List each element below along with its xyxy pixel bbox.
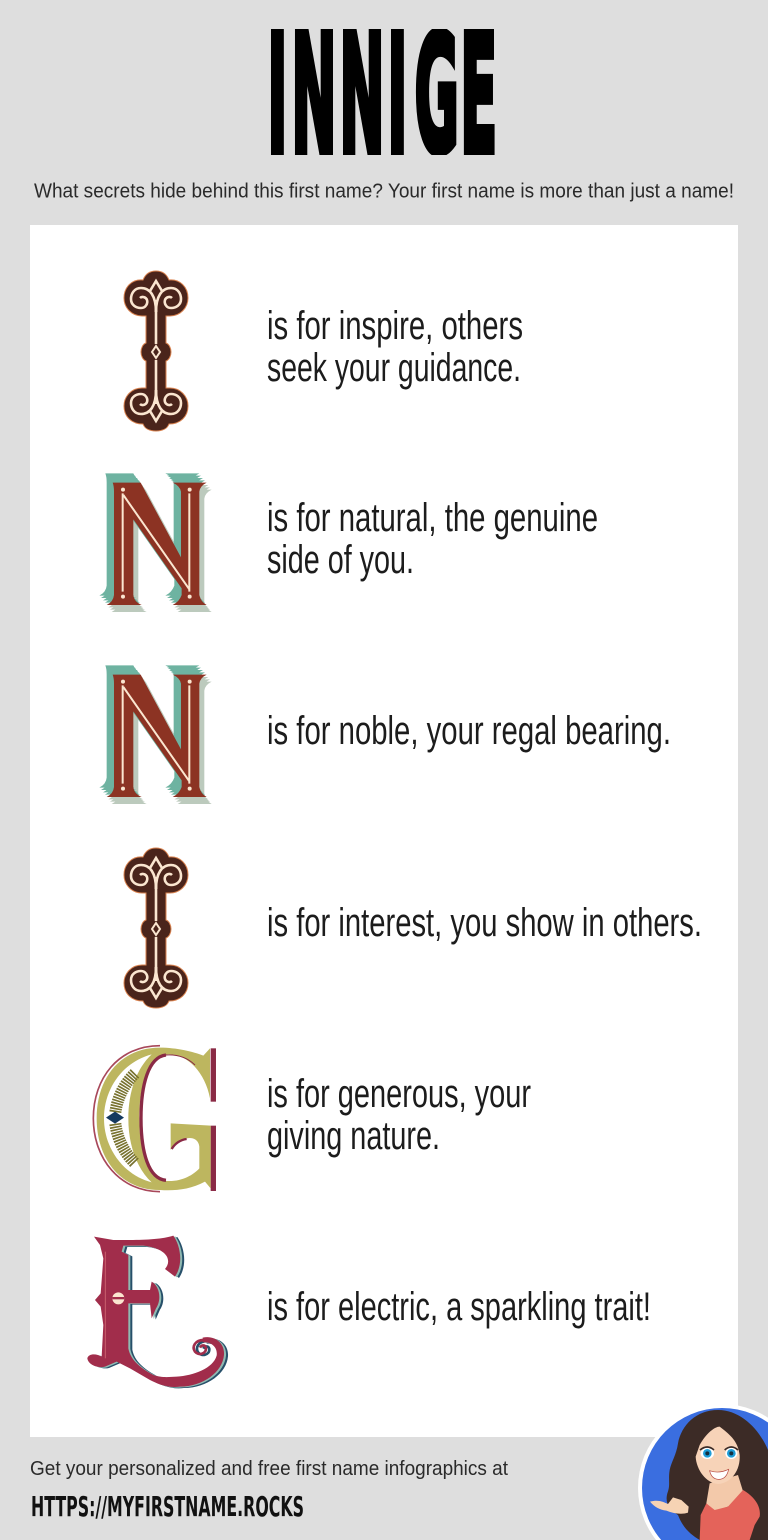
title: INNIGE bbox=[267, 2, 497, 190]
text: I meaning bbox=[267, 304, 523, 390]
text: I meaning: seek your guidance. bbox=[267, 346, 521, 390]
avatar bbox=[638, 1404, 768, 1540]
text: N meaning: is for natural, the genuine bbox=[267, 496, 598, 540]
icon: ornate letter I bbox=[124, 848, 188, 1008]
icon: ornate letter G bbox=[93, 1046, 216, 1192]
text: I meaning: is for inspire, others bbox=[267, 304, 523, 348]
text: N meaning bbox=[267, 496, 598, 582]
icon: ornate letter N bbox=[99, 665, 212, 804]
text: N meaning: side of you. bbox=[267, 538, 414, 582]
text: G meaning: is for generous, your bbox=[267, 1072, 531, 1116]
footer url: HTTPS://MYFIRSTNAME.ROCKS bbox=[31, 1490, 304, 1523]
icon: ornate letter I bbox=[124, 271, 188, 431]
footer text: Get your personalized and free first name infographics at bbox=[30, 1457, 508, 1480]
icon: ornate letter E bbox=[87, 1236, 228, 1388]
subtitle: What secrets hide behind this first name? Your first name is more than just a name! bbox=[34, 180, 734, 202]
icon: ornate letter N bbox=[99, 473, 212, 612]
text: G meaning: giving nature. bbox=[267, 1114, 440, 1158]
panel: letters bbox=[30, 225, 738, 1437]
text: G meaning bbox=[267, 1072, 531, 1158]
